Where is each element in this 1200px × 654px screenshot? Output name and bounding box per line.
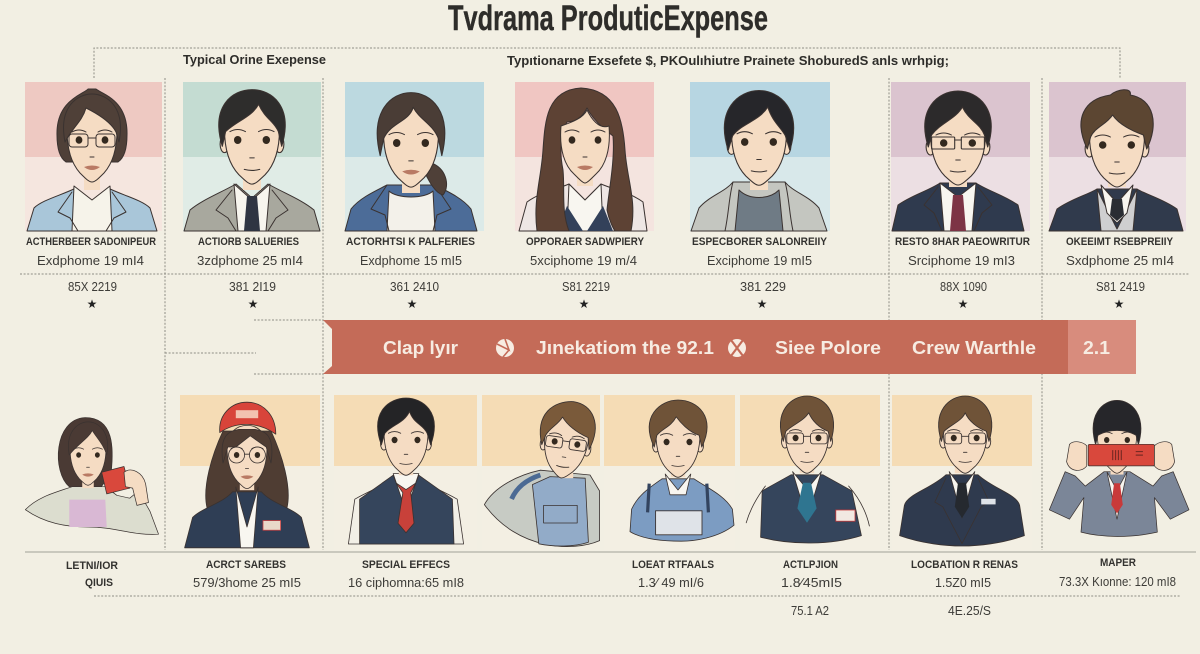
bottom portrait 8 [1049, 400, 1189, 536]
bottom portrait 1 label [66, 560, 118, 589]
card 2 labels [197, 236, 303, 311]
card 2 labels: 381 2I19 [229, 280, 276, 294]
ribbon label 1: Clap lyır [383, 338, 458, 358]
card 2 labels: ★ [248, 297, 258, 311]
bottom card 6 label: ACTLPJION [783, 559, 838, 571]
card 1 labels: 85X 2219 [68, 280, 117, 294]
portrait card 1 [25, 82, 162, 231]
card 4 labels: 5xciphome 19 m/4 [530, 254, 637, 268]
bottom card 3 label: 16 ciphomna:65 mI8 [348, 576, 464, 590]
ribbon label 3: Siee Polore [775, 338, 881, 358]
bottom card 5 [604, 395, 735, 550]
card 3 labels [346, 236, 475, 311]
card 1 labels [26, 236, 156, 311]
card 5 labels: Exciphome 19 mI5 [707, 254, 812, 268]
portrait card 7 [1049, 82, 1186, 231]
bottom portrait 8 label [1059, 557, 1176, 589]
bottom card 3 [334, 395, 477, 550]
card 6 labels: ★ [958, 297, 968, 311]
card 3 labels: ★ [407, 297, 417, 311]
card 4 labels: OPPORAER SADWPIERY [526, 236, 645, 248]
subheading right: Typıtionarne Exsefete $, PKOulıhiutre Prainete ShoburedS anls wrhpig; [507, 53, 949, 68]
card 6 labels: 88X 1090 [940, 280, 987, 294]
card 5 labels: ESPECBORER SALONREIIY [692, 236, 828, 248]
card 1 labels: ★ [87, 297, 97, 311]
card 5 labels [692, 236, 828, 311]
card 4 labels: S81 2219 [562, 280, 610, 294]
portrait card 4 [515, 82, 654, 231]
bottom card 2 label: ACRCT SAREBS [206, 559, 286, 571]
bottom card 7 label: LOCBATION R RENAS [911, 559, 1018, 571]
bottom card 2 label [193, 559, 301, 590]
bottom card 6 label [781, 559, 842, 618]
portrait card 2 [183, 82, 321, 231]
bottom card 7 [892, 395, 1032, 550]
card 3 labels: 361 2410 [390, 280, 439, 294]
bottom card 3 label: SPECIAL EFFECS [362, 559, 450, 571]
subheading left: Typical Orine Exepense [183, 52, 326, 67]
bottom portrait 8 label: 73.3X Kıonne: 120 mI8 [1059, 575, 1176, 589]
bottom card 5 label [632, 559, 714, 590]
icon: red clapper card [1088, 444, 1154, 466]
bottom card 6 label: 1.8⁄45mI5 [781, 576, 842, 590]
bottom card 5 label: 1.3⁄ 49 mI/6 [638, 576, 704, 590]
baseline rule [25, 551, 1196, 553]
ribbon value: 2.1 [1083, 338, 1110, 358]
card 6 labels: Srciphome 19 mI3 [908, 254, 1015, 268]
card 1 labels: ACTHERBEER SADONIPEUR [26, 236, 156, 248]
card 6 labels: RESTO 8HAR PAEOWRITUR [895, 236, 1030, 248]
ribbon label 2: Jınekatiom the 92.1 [536, 338, 714, 358]
bottom card 5 label: LOEAT RTFAALS [632, 559, 714, 571]
bottom portrait 1 label: LETNI/IOR [66, 560, 118, 572]
title: Tvdrama ProduticExpense [448, 0, 768, 38]
ribbon label 4: Crew Warthle [912, 338, 1036, 358]
card 7 labels [1066, 236, 1174, 311]
bottom card 7 label: 1.5Z0 mI5 [935, 576, 991, 590]
card 5 labels: 381 229 [740, 280, 786, 294]
card 7 labels: ★ [1114, 297, 1124, 311]
card 5 labels: ★ [757, 297, 767, 311]
card 2 labels: ACTIORB SALUERIES [198, 236, 299, 248]
card 7 labels: OKEEIMT RSEBPREIIY [1066, 236, 1174, 248]
portrait card 3 [345, 82, 484, 231]
bottom card 7 label: 4E.25/S [948, 604, 991, 618]
bottom card 6 label: 75.1 A2 [791, 604, 829, 618]
portrait card 6 [891, 82, 1030, 231]
card 4 labels [526, 236, 645, 311]
bottom card 2 [180, 395, 320, 550]
bottom card 6 [740, 395, 880, 550]
bottom portrait 8 label: MAPER [1100, 557, 1136, 569]
card 6 labels [895, 236, 1030, 311]
bottom card 3 label [348, 559, 464, 590]
icon: ribbon disc [496, 339, 514, 357]
card 1 labels: Exdphome 19 mI4 [37, 254, 144, 268]
portrait card 5 [690, 82, 830, 231]
bottom card 7 label [911, 559, 1018, 618]
card 7 labels: S81 2419 [1096, 280, 1145, 294]
bottom portrait 1 label: QIUIS [85, 577, 113, 589]
bottom card 2 label: 579/3home 25 mI5 [193, 576, 301, 590]
ribbon banner [323, 320, 1136, 374]
card 3 labels: Exdphome 15 mI5 [360, 254, 462, 268]
icon: ribbon cross [728, 339, 746, 357]
card 3 labels: ACTORHTSI K PALFERIES [346, 236, 475, 248]
card 4 labels: ★ [579, 297, 589, 311]
bottom portrait 1 [25, 418, 159, 534]
bottom card 4 [482, 395, 600, 550]
card 2 labels: 3zdphome 25 mI4 [197, 254, 303, 268]
card 7 labels: Sxdphome 25 mI4 [1066, 254, 1174, 268]
